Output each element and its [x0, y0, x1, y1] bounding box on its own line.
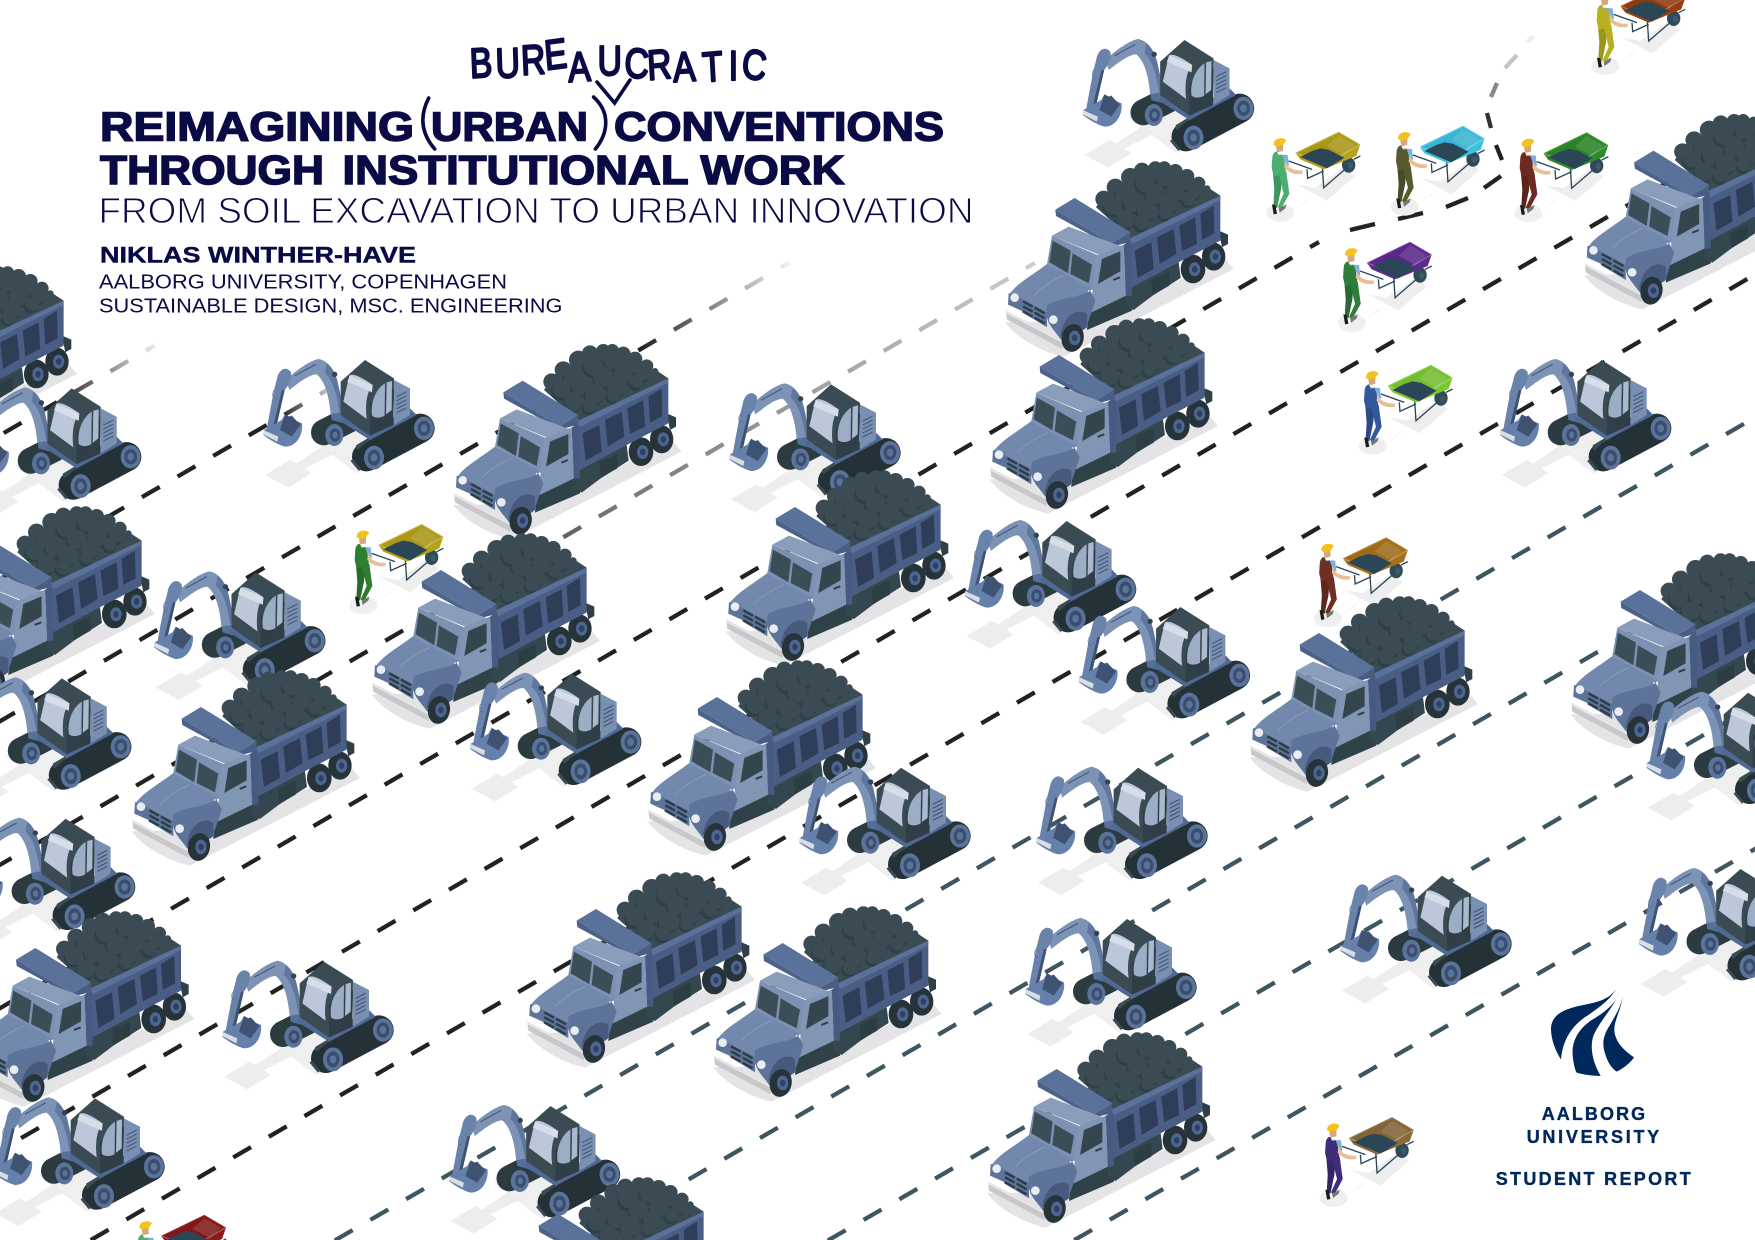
- title line 2: THROUGH: [100, 147, 324, 193]
- subtitle: FROM SOIL EXCAVATION TO URBAN INNOVATION: [98, 190, 974, 231]
- worker with tan wheelbarrow: [1320, 1117, 1414, 1207]
- road line A: [0, 389, 329, 595]
- handwritten brackets and insertion mark: [423, 80, 630, 149]
- title line 1: [100, 104, 944, 150]
- worker with green wheelbarrow: [1514, 132, 1608, 222]
- title line 2: INSTITUTIONAL WORK: [342, 147, 845, 193]
- excavator: [449, 1105, 619, 1234]
- excavator: [1036, 767, 1207, 895]
- excavator: [154, 571, 325, 700]
- worker with brown wheelbarrow: [1314, 537, 1408, 627]
- worker with red wheelbarrow: [132, 1215, 226, 1240]
- dump truck: [990, 318, 1218, 514]
- road line I: [555, 554, 1755, 1240]
- programme line: SUSTAINABLE DESIGN, MSC. ENGINEERING: [99, 296, 562, 318]
- excavator: [1079, 606, 1249, 735]
- excavator: [470, 673, 641, 801]
- excavator: [263, 359, 434, 488]
- road line C: [0, 262, 790, 738]
- excavator: [0, 818, 135, 946]
- excavator: [0, 387, 141, 516]
- road line H: [308, 408, 1755, 1240]
- excavator: [729, 383, 900, 512]
- dump truck: [527, 872, 755, 1068]
- road line E: [0, 242, 1319, 1028]
- excavator: [1340, 875, 1511, 1003]
- title line 1: URBAN: [431, 104, 588, 150]
- university name: UNIVERSITY: [1527, 1127, 1659, 1147]
- road line D: [0, 263, 1035, 884]
- excavator: [1639, 868, 1755, 997]
- university name: [1527, 1104, 1659, 1147]
- road line J: [801, 699, 1755, 1240]
- curved road to the top: [1350, 36, 1534, 230]
- excavator: [1646, 692, 1755, 820]
- excavator: [0, 1097, 164, 1226]
- worker with yellow wheelbarrow: [1266, 132, 1360, 222]
- worker with purple wheelbarrow: [1338, 242, 1432, 332]
- excavator: [1500, 359, 1671, 488]
- author name: NIKLAS WINTHER-HAVE: [100, 242, 416, 267]
- dump truck: [1250, 596, 1478, 792]
- excavator: [222, 961, 393, 1089]
- university name: AALBORG: [1542, 1104, 1645, 1124]
- worker with rust wheelbarrow: [1591, 0, 1685, 75]
- road line B: [0, 346, 155, 448]
- dump truck: [0, 266, 77, 462]
- dump truck: [1005, 161, 1234, 357]
- excavator: [799, 767, 970, 895]
- dump truck: [1584, 114, 1755, 309]
- road line G: [64, 264, 1755, 1240]
- worker with lime wheelbarrow: [1359, 365, 1453, 455]
- dump truck: [0, 506, 155, 702]
- excavator: [0, 677, 131, 806]
- dump truck: [0, 911, 194, 1107]
- handwritten word: BUREAUCRATIC: [469, 31, 769, 92]
- report label: STUDENT REPORT: [1496, 1169, 1691, 1189]
- icon: Aalborg University logo: [1551, 989, 1634, 1076]
- worker with cyan wheelbarrow: [1391, 126, 1485, 216]
- excavator: [965, 520, 1136, 649]
- dump truck: [132, 670, 360, 866]
- excavator: [1025, 918, 1196, 1047]
- dump truck: [726, 470, 954, 666]
- dump truck: [372, 533, 600, 729]
- excavator: [1083, 39, 1253, 168]
- dump truck: [648, 660, 876, 856]
- university line: AALBORG UNIVERSITY, COPENHAGEN: [99, 271, 507, 293]
- title line 2: [100, 147, 845, 193]
- worker with yellow wheelbarrow: [349, 524, 443, 614]
- road line K: [1048, 846, 1755, 1240]
- dump truck: [713, 906, 942, 1102]
- dump truck: [453, 344, 682, 539]
- dump truck: [1571, 553, 1755, 749]
- title line 1: REIMAGINING: [100, 104, 414, 150]
- dump truck: [987, 1032, 1216, 1228]
- dump truck: [489, 1177, 717, 1240]
- title line 1: CONVENTIONS: [614, 104, 944, 150]
